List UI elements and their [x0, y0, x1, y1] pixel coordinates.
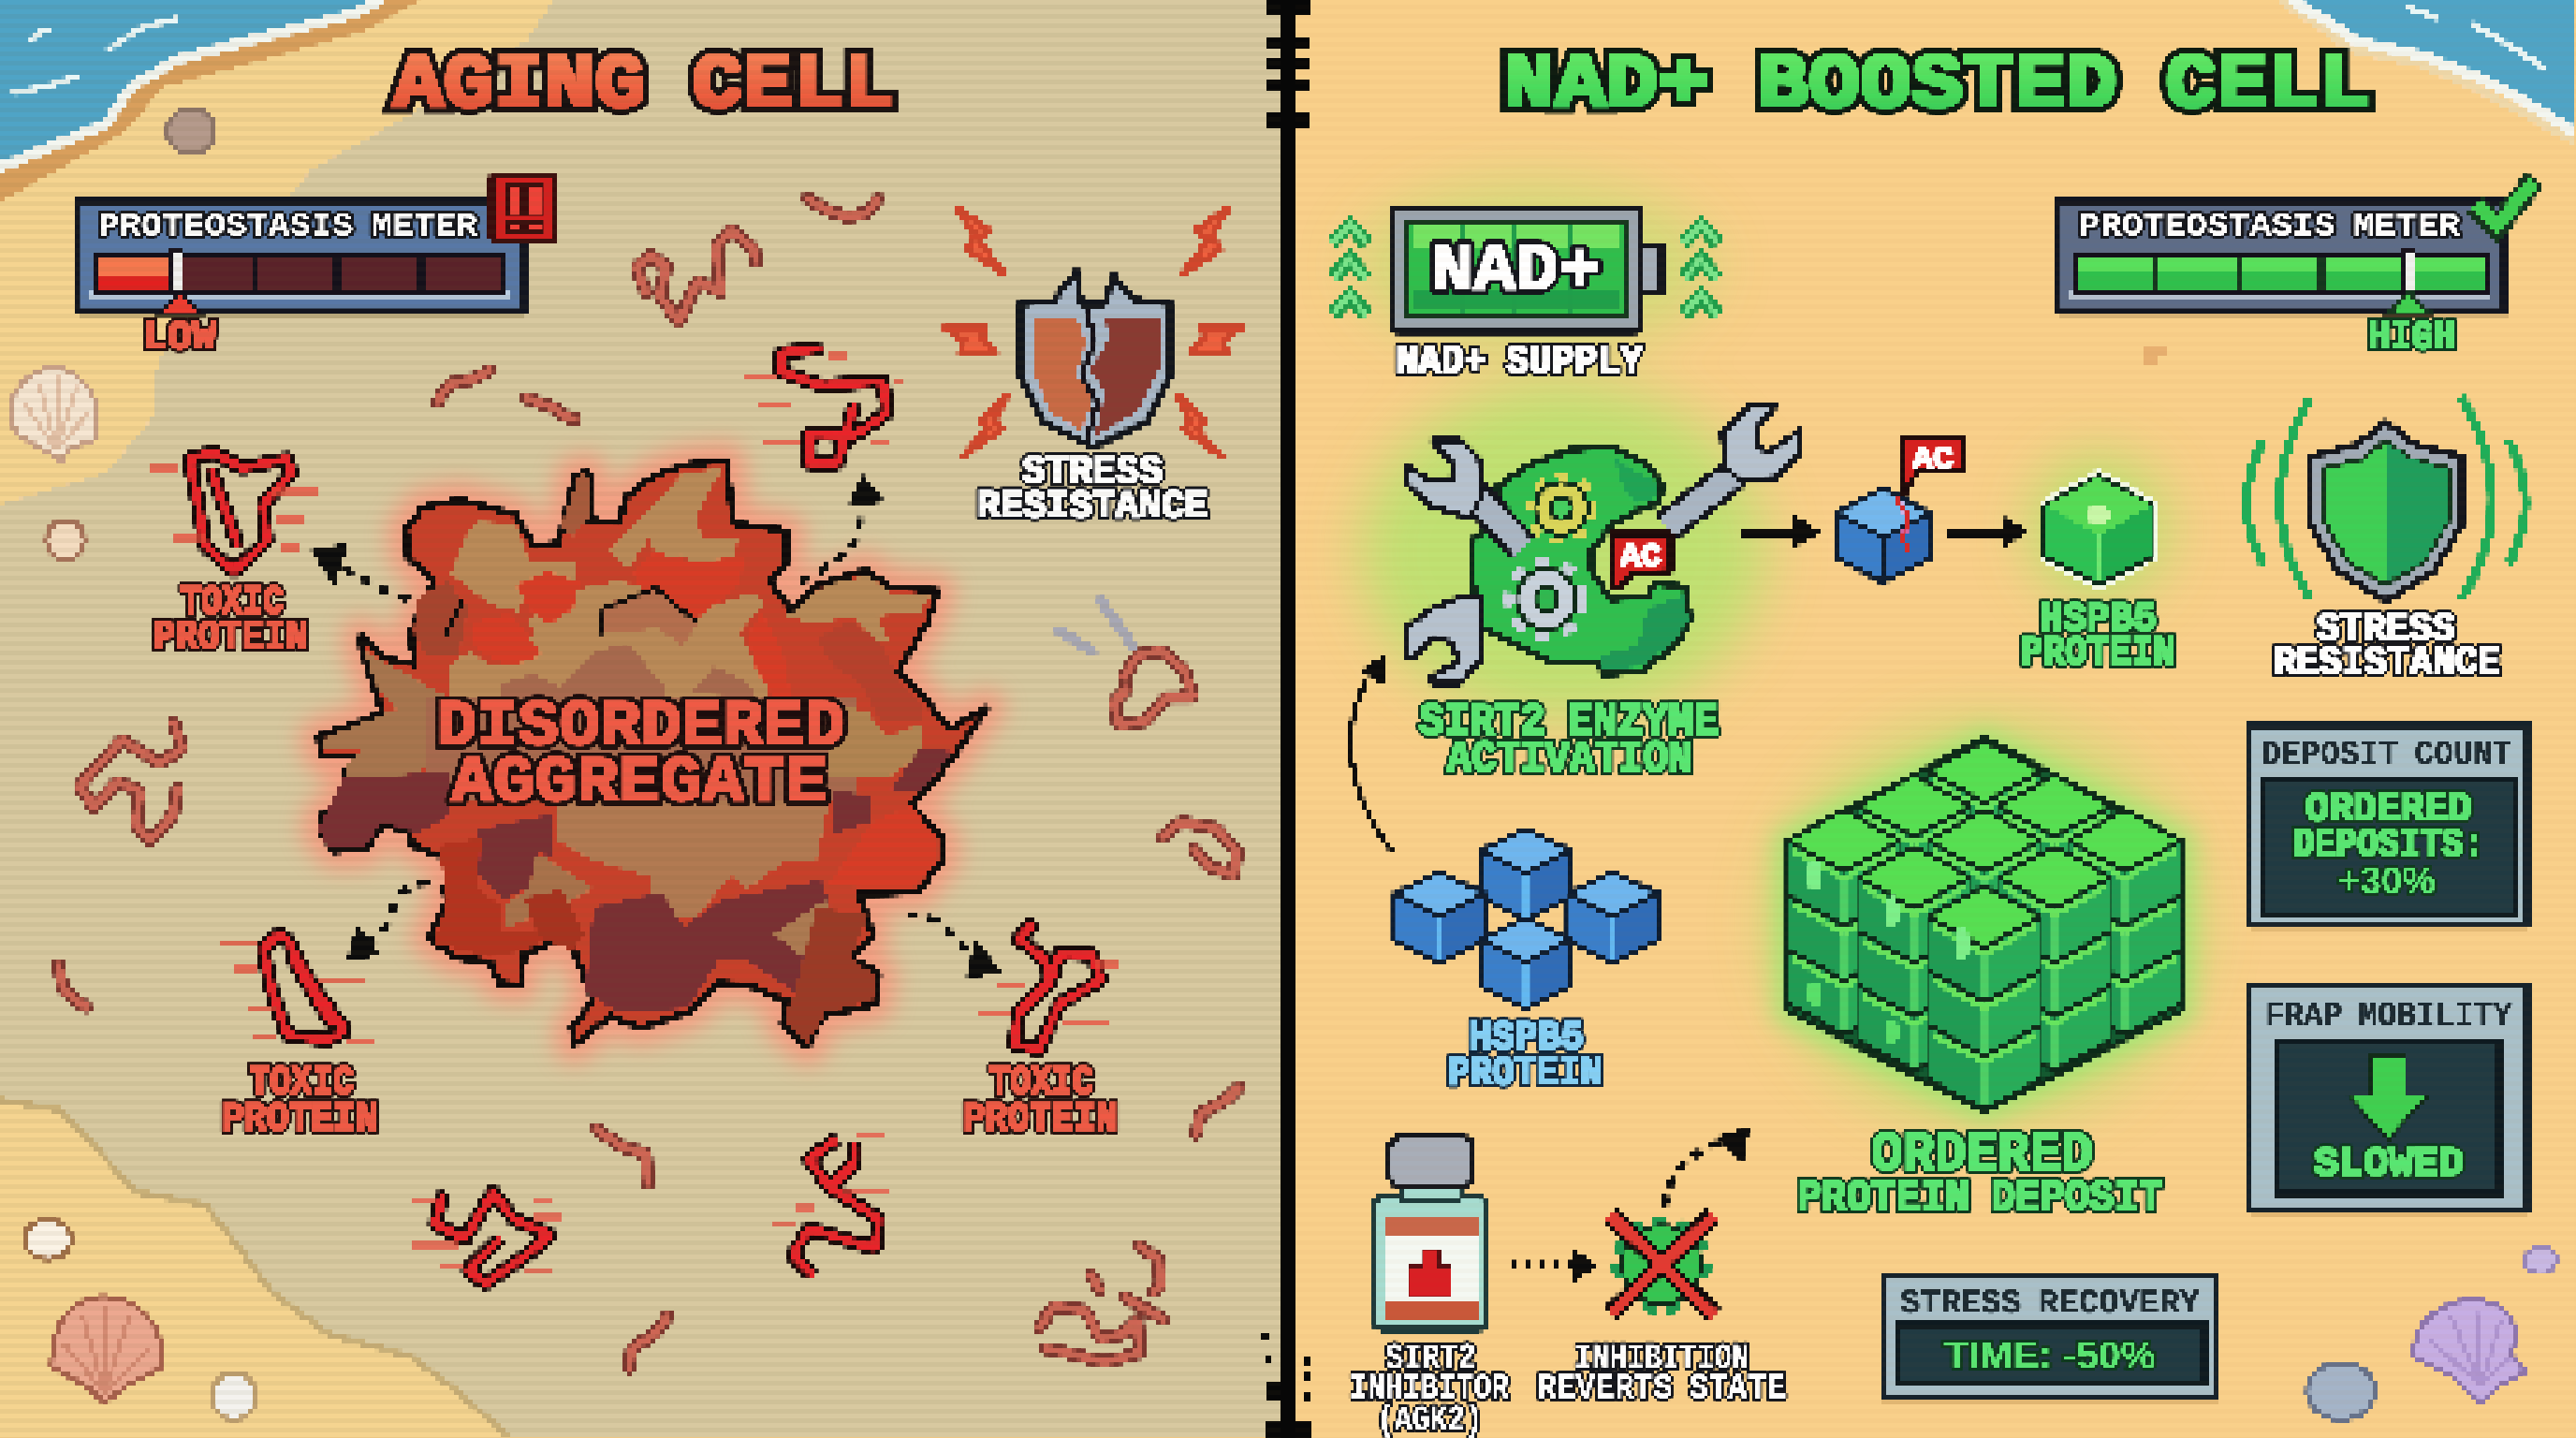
- ordered label: ORDERED: [1871, 1125, 2093, 1186]
- stress resistance right line 2: RESISTANCE: [2274, 640, 2500, 685]
- proteostasis meter: high: [2058, 201, 2507, 316]
- alert badge: [491, 174, 555, 242]
- shield signal arcs: [2247, 397, 2525, 599]
- left panel artwork: [10, 109, 1241, 1419]
- aggregate blob: [318, 461, 987, 1047]
- toxic protein label 1: TOXIC: [181, 580, 284, 626]
- battery label: NAD+: [1431, 233, 1601, 310]
- protein deposit label: PROTEIN DEPOSIT: [1797, 1174, 2163, 1223]
- toxic protein 5: [414, 1192, 562, 1284]
- battery: NAD+ supply: [1393, 208, 1661, 331]
- shell: purple scallop: [2414, 1299, 2525, 1402]
- stress recovery title: STRESS RECOVERY: [1900, 1284, 2200, 1323]
- blue cube with acetyl mark: [1837, 489, 1930, 582]
- toxic protein label 2 line 2: PROTEIN: [222, 1096, 378, 1143]
- dotted arrow to gear: [1510, 1247, 1597, 1284]
- sirt2 inhibitor label line 2: INHIBITOR: [1350, 1369, 1509, 1409]
- background: left aging beach: [0, 0, 1288, 1438]
- enzyme label: SIRT2 ENZYME: [1419, 697, 1719, 748]
- frap title: FRAP MOBILITY: [2265, 997, 2512, 1035]
- meter label right: PROTEOSTASIS METER: [2079, 210, 2461, 245]
- hspb5 green label: HSPB5: [2040, 596, 2157, 643]
- background: right boosted beach: [1288, 0, 2576, 1438]
- inhibition label line 2: REVERTS STATE: [1537, 1369, 1786, 1409]
- aggregate label: DISORDERED: [436, 691, 845, 765]
- dim worm debris: [58, 198, 1240, 1369]
- inhibitor bottle: [1374, 1137, 1486, 1329]
- dashed arrow to protein 2: [801, 474, 885, 582]
- gear: yellow: [1530, 477, 1592, 539]
- AC flag on cube: [1902, 436, 1962, 492]
- blue HSPB5 cubes: [1395, 829, 1658, 1008]
- deposit value line 1: ORDERED: [2305, 786, 2472, 833]
- toxic protein 2: [744, 348, 905, 463]
- gear: silver: [1511, 564, 1582, 635]
- stress resistance left line 2: RESISTANCE: [977, 484, 1208, 529]
- toxic protein 6: [772, 1137, 889, 1276]
- AC on enzyme flag: AC: [1620, 540, 1661, 576]
- curved arrow up to enzyme: [1351, 653, 1393, 852]
- shield: stress resistance: [2310, 422, 2462, 601]
- pebble: small white: [212, 1372, 256, 1419]
- high label: HIGH: [2368, 315, 2455, 361]
- stack tight glow: [1774, 726, 2195, 1123]
- toxic protein 4: [978, 921, 1120, 1049]
- dashed arrow to protein 3: [346, 883, 429, 961]
- rock: [168, 109, 214, 154]
- check mark: [2475, 180, 2535, 227]
- low label: LOW: [143, 315, 217, 361]
- green HSPB5 cube: [2042, 473, 2155, 587]
- enzyme body: [1472, 447, 1690, 674]
- panel: stress recovery: [1883, 1274, 2218, 1402]
- chevrons right: [1684, 225, 1718, 315]
- inhibited gear with X: [1610, 1215, 1714, 1314]
- title: NAD+ boosted cell: NAD+ BOOSTED CELL: [1503, 42, 2371, 129]
- frap slowed label: SLOWED: [2314, 1141, 2464, 1188]
- toxic protein label 2: TOXIC: [249, 1060, 354, 1107]
- hspb5 blue label: HSPB5: [1469, 1015, 1584, 1062]
- deposit value line 2: DEPOSITS:: [2293, 822, 2484, 869]
- inhibition label: INHIBITION: [1574, 1339, 1749, 1379]
- right panel artwork: [1333, 180, 2556, 1419]
- panel: deposit count: [2250, 726, 2529, 932]
- aggregate label line 2: AGGREGATE: [451, 747, 827, 821]
- stress resistance right: STRESS: [2317, 607, 2455, 652]
- right panel green glows: [1357, 183, 2200, 1123]
- title: aging cell: AGING CELL: [393, 42, 894, 129]
- toxic protein label 3 line 2: PROTEIN: [963, 1096, 1118, 1143]
- ordered deposit cube stack: [1788, 738, 2181, 1111]
- proteostasis meter: low: [79, 201, 526, 316]
- pebble: [47, 521, 84, 560]
- lightning bolts: [945, 208, 1241, 457]
- chevrons left: [1333, 225, 1367, 315]
- wrench: bottom: [1407, 596, 1482, 683]
- deposit value line 3: +30%: [2338, 860, 2436, 902]
- toxic protein label 1 line 2: PROTEIN: [154, 614, 308, 661]
- dashed arrow to protein 4: [908, 916, 1002, 979]
- aggregate red glow: [318, 461, 987, 1047]
- cracked shield: [1020, 271, 1170, 448]
- pebble: small purple: [2525, 1247, 2556, 1273]
- wrench: left: [1407, 440, 1523, 548]
- toxic protein 3: [221, 934, 373, 1040]
- arrow: enzyme to cube: [1743, 515, 1821, 549]
- pebble: white: [24, 1220, 71, 1259]
- AC flag on enzyme: [1612, 534, 1671, 588]
- toxic protein 1: [150, 452, 318, 571]
- check mark fill: [2478, 183, 2533, 225]
- stress resistance left: STRESS: [1022, 449, 1163, 494]
- deposit count title: DEPOSIT COUNT: [2261, 736, 2512, 774]
- panel: frap mobility: [2250, 985, 2529, 1215]
- shell: cream scallop: [10, 367, 97, 461]
- AC on cube flag: AC: [1912, 443, 1954, 478]
- toxic protein label 3: TOXIC: [989, 1060, 1093, 1107]
- hspb5 green label line 2: PROTEIN: [2021, 630, 2175, 677]
- dashed arrow to protein 1: [311, 543, 409, 599]
- shell: pink scallop: [51, 1297, 162, 1402]
- pebble: gray: [2307, 1363, 2375, 1419]
- NAD+ supply label: NAD+ SUPPLY: [1396, 339, 1644, 386]
- wrench: right: [1666, 405, 1800, 527]
- stress recovery value: TIME: -50%: [1944, 1335, 2156, 1376]
- divider: [1261, 0, 1311, 1438]
- enzyme: wrenches and body: [1407, 405, 1800, 683]
- titles: [393, 42, 2371, 129]
- all text labels: [143, 233, 2500, 1223]
- hspb5 blue label line 2: PROTEIN: [1448, 1050, 1603, 1097]
- enzyme label line 2: ACTIVATION: [1447, 735, 1692, 785]
- dashed arrow to stack: [1664, 1127, 1749, 1206]
- arrow: cube to green cube: [1949, 515, 2028, 549]
- sirt2 inhibitor label: SIRT2: [1385, 1339, 1476, 1379]
- meter label left: PROTEOSTASIS METER: [98, 210, 478, 245]
